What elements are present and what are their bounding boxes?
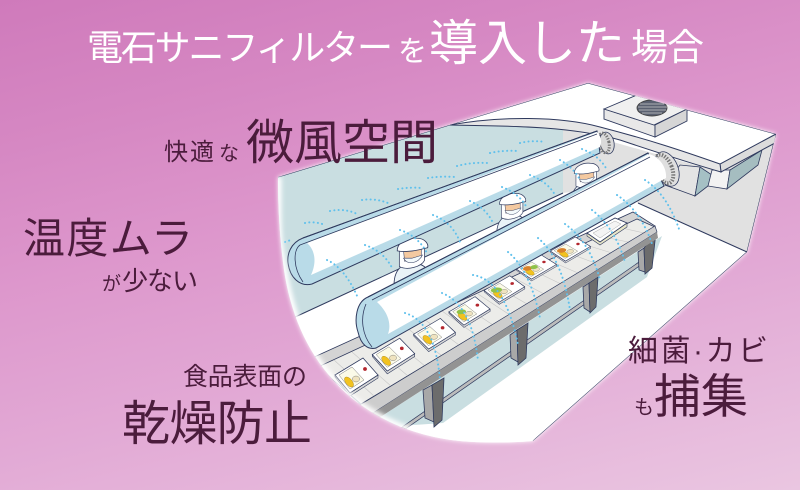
callout: prevents food surface drying [122,363,312,451]
duct 1 ring [599,132,615,154]
title: 導入した [429,17,625,71]
workers [573,162,600,191]
floor shadow under conveyor [380,236,662,426]
callout: comfortable breeze space: な [219,143,239,165]
callout: prevents food surface drying: 食品表面の [183,363,307,391]
duct 2 ring [655,151,680,187]
callout: little temperature variation: が [102,273,121,295]
airflow dotted lines [285,141,680,380]
callout: captures bacteria and mold [628,335,768,423]
ceiling air unit [604,95,687,137]
duct 1 [288,131,601,285]
conveyor belt [314,212,658,417]
title [87,17,704,71]
room outline [278,83,776,441]
grey end wall [563,128,776,252]
title: 電石サニフィルター [87,27,393,68]
soft inner edge fade [278,177,533,441]
callout: comfortable breeze space: 快適 [164,139,214,166]
duct 2 [356,153,666,348]
title: を [398,36,427,68]
wall boxes under ceiling [665,150,762,196]
conveyor rails behind legs [398,260,645,432]
callout: little temperature variation: 少ない [122,266,198,296]
callout: little temperature variation: 温度ムラ [23,215,193,262]
illustration: factory room cutaway [270,80,790,450]
callout: little temperature variation [23,215,198,296]
title: 場合 [631,27,704,68]
callout: prevents food surface drying: 乾燥防止 [122,398,312,451]
teal back wall [270,125,563,322]
callout: captures bacteria and mold: 細菌·カビ [628,335,768,368]
conveyor legs [423,232,656,427]
food trays [335,218,627,396]
ceiling beam [450,118,776,172]
callout: captures bacteria and mold: も [634,397,654,419]
callout: comfortable breeze space: 微風空間 [246,117,438,170]
callout: captures bacteria and mold: 捕集 [654,370,748,423]
